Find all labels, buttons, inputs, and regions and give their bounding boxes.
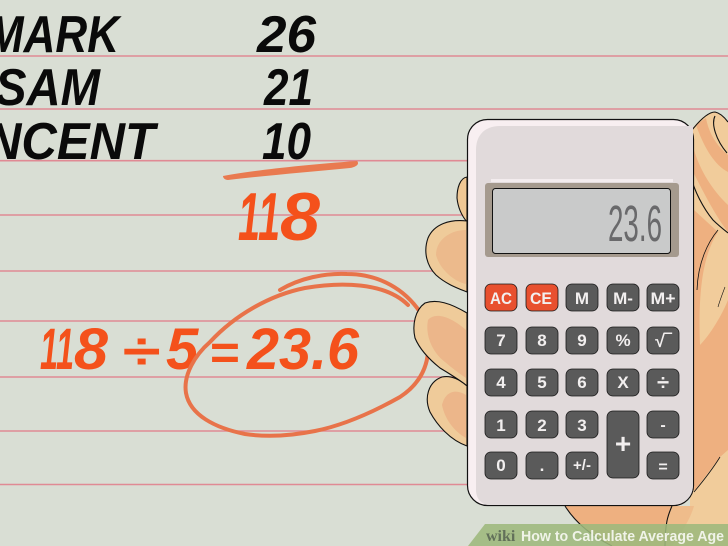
sum underline stroke (223, 161, 358, 180)
small top finger (457, 177, 467, 222)
key labels: + (615, 428, 631, 459)
finger three (427, 377, 467, 446)
sum total 118: 1 (238, 179, 260, 255)
key labels: 0 (496, 456, 506, 475)
wikiHow title banner: wiki (486, 528, 516, 545)
keypad (485, 284, 679, 479)
key labels: 8 (537, 331, 547, 350)
key labels: 7 (496, 331, 506, 350)
key labels: M (575, 289, 589, 308)
key labels: . (540, 456, 544, 475)
division equation (40, 317, 360, 382)
hand outlines (565, 112, 728, 546)
palm shading (565, 118, 728, 546)
table of names and ages (0, 6, 317, 171)
division equation: ÷ (122, 323, 160, 381)
division equation: 5 (166, 317, 199, 382)
key labels: +/- (573, 457, 591, 474)
key labels: 1 (496, 416, 506, 435)
circle around result (186, 274, 428, 436)
display (485, 183, 679, 257)
sum total 118: 1 (258, 179, 280, 255)
key labels: 5 (537, 373, 547, 392)
key labels: CE (530, 289, 552, 308)
key labels: 9 (577, 331, 587, 350)
key labels: 6 (577, 373, 587, 392)
key labels: M- (613, 289, 633, 308)
wikiHow title banner (468, 524, 728, 546)
wikiHow title banner: How to Calculate Average Age (521, 529, 724, 545)
table of names and ages: 21 (263, 59, 313, 117)
calculator body (468, 120, 694, 506)
sum total 118: 8 (280, 179, 320, 255)
finger one (426, 221, 467, 292)
display: 23.6 (608, 195, 662, 252)
key labels: ÷ (657, 370, 669, 395)
key labels: % (615, 331, 631, 350)
key labels (490, 289, 676, 476)
table of names and ages: 26 (256, 6, 317, 64)
key labels: AC (490, 289, 512, 308)
sum total 118 (238, 179, 320, 255)
key labels: √‾ (655, 331, 673, 351)
table of names and ages: 10 (262, 113, 311, 171)
key labels: X (617, 373, 629, 392)
key labels: M+ (650, 289, 676, 308)
key labels: = (658, 459, 668, 476)
key labels: 2 (537, 416, 547, 435)
finger two (414, 301, 467, 386)
division equation: 23.6 (246, 317, 360, 382)
division equation: 1 (40, 317, 58, 382)
division equation: 8 (74, 317, 109, 382)
palm and thumb side (565, 112, 728, 546)
key labels: - (660, 417, 666, 434)
division equation: = (209, 327, 239, 380)
key labels: 4 (496, 373, 506, 392)
hand holding calculator (414, 112, 728, 546)
division equation: 1 (56, 317, 74, 382)
key labels: 3 (577, 416, 587, 435)
